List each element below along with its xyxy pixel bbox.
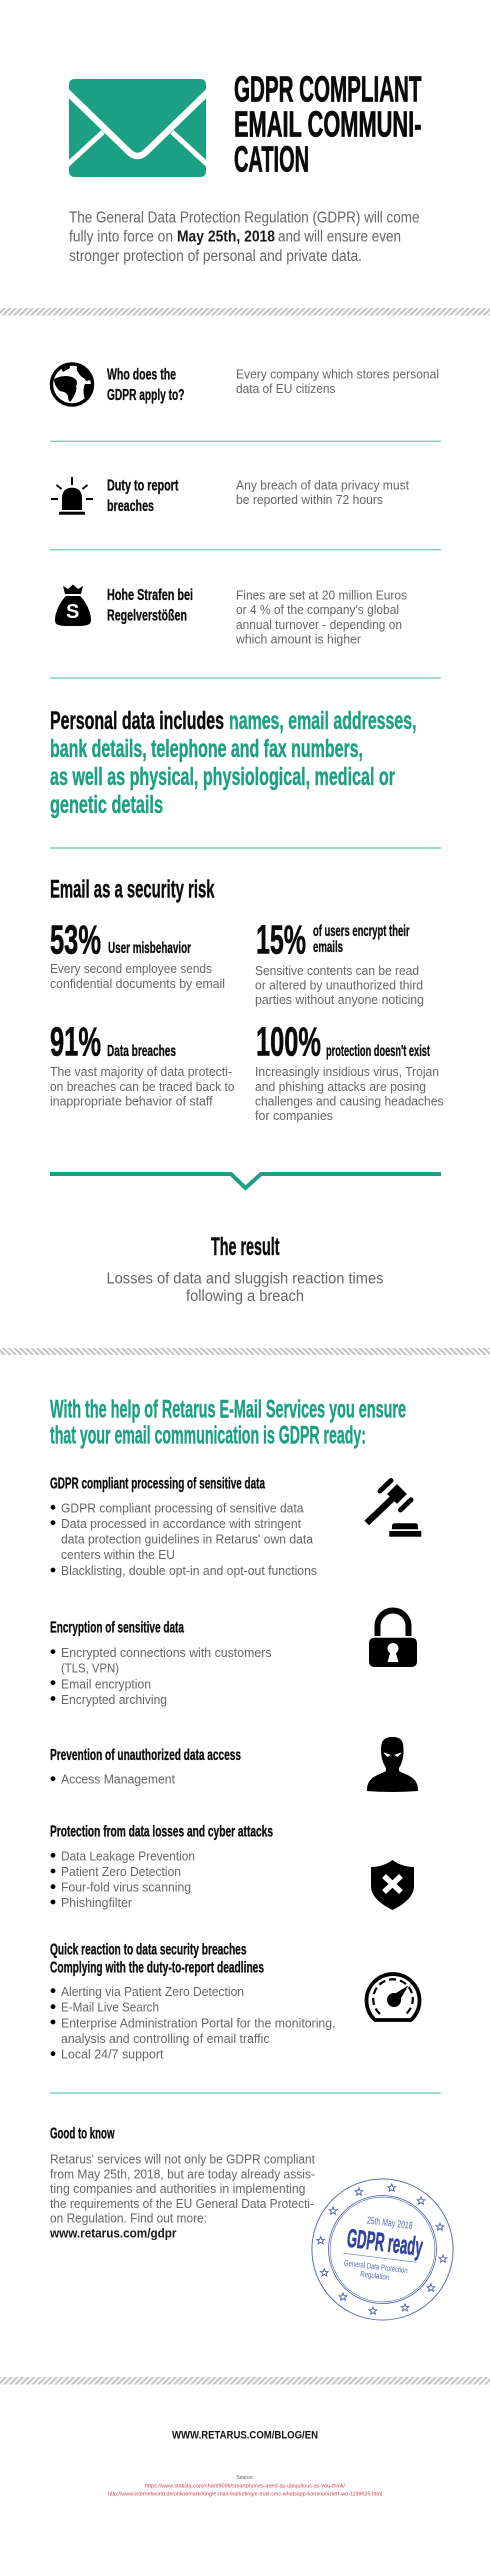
service: compliant processing: centers within the EU	[61, 1547, 175, 1562]
panel: good to know: www.retarus.com/gdpr	[49, 2226, 177, 2240]
service: data loss protection	[50, 1824, 273, 1910]
fact heading: GDPR apply to?	[107, 387, 184, 404]
icon: padlock	[369, 1610, 417, 1667]
panel: good to know: ting companies and authorities in implementing	[50, 2181, 306, 2196]
fact heading: Who does the	[107, 366, 176, 383]
service: prevention of unauthorized access: Access Management	[61, 1772, 175, 1787]
fact text: Every company which stores personal	[236, 366, 439, 381]
panel: the result: following a breach	[186, 1288, 304, 1305]
intro text: stronger protection of personal and private data.	[69, 248, 362, 265]
service: data loss protection: Patient Zero Detection	[61, 1864, 181, 1879]
panel: good to know: Retarus' services will not only be GDPR compliant	[50, 2152, 315, 2167]
stat: 53%: confidential documents by email	[50, 976, 225, 991]
icon: money bag	[55, 584, 91, 626]
title	[234, 69, 422, 180]
footer: sources	[108, 2475, 382, 2498]
fact: duty to report breaches	[51, 477, 409, 515]
stat: 91%	[50, 1019, 234, 1108]
intro text: May 25th, 2018	[177, 229, 275, 246]
stat: 53%: User misbehavior	[108, 940, 191, 957]
intro text: and will ensure even	[278, 229, 401, 246]
stat: 15%: emails	[313, 939, 343, 956]
fact text: Fines are set at 20 million Euros	[236, 587, 407, 602]
panel: good to know: from May 25th, 2018, but are today already assis-	[50, 2166, 315, 2182]
panel: retarus services	[50, 1396, 421, 2062]
footer: sources: https://www.statista.com/chart/9096/smartphones-arent-as-ubiquitous-as-you-think/	[145, 2483, 346, 2489]
panel: the result: Losses of data and sluggish reaction times	[106, 1270, 384, 1287]
icon: shield with cross	[371, 1860, 414, 1910]
fact heading: breaches	[107, 498, 154, 515]
service: compliant processing: GDPR compliant processing of sensitive data	[61, 1500, 304, 1515]
service: compliant processing: GDPR compliant processing of sensitive data	[50, 1475, 265, 1492]
service: encryption	[50, 1620, 272, 1707]
service: quick reaction: E-Mail Live Search	[61, 2000, 159, 2015]
fact text	[236, 366, 439, 396]
stat: 91%: on breaches can be traced back to	[50, 1079, 234, 1094]
panel: personal data statement	[50, 707, 416, 819]
stat: 53%: 53%	[50, 916, 101, 962]
service: encryption: Encrypted connections with customers	[61, 1645, 272, 1660]
fact text: Any breach of data privacy must	[236, 477, 409, 492]
fact heading	[107, 366, 184, 404]
service: quick reaction: Alerting via Patient Zero Detection	[61, 1984, 244, 1999]
fact heading: Duty to report	[107, 478, 179, 495]
stat: 15%: parties without anyone noticing	[255, 992, 424, 1007]
stamp: GDPR ready	[312, 2179, 453, 2320]
stat: 91%: The vast majority of data protecti-	[50, 1064, 232, 1079]
icon: money bag: S	[66, 601, 79, 623]
stat: 100%: Increasingly insidious virus, Trojan	[255, 1064, 439, 1079]
service: compliant processing: data protection guidelines in Retarus' own data	[61, 1532, 314, 1547]
service: compliant processing: Data processed in accordance with stringent	[61, 1516, 301, 1531]
service: quick reaction: Complying with the duty-to-report deadlines	[50, 1959, 264, 1976]
service: data loss protection: Phishingfilter	[61, 1895, 133, 1910]
fact text: or 4 % of the company's global	[236, 602, 399, 617]
panel: good to know: the requirements of the EU General Data Protecti-	[50, 2196, 314, 2211]
service: quick reaction: Quick reaction to data security breaches	[50, 1941, 247, 1958]
intro text: fully into force on	[69, 229, 173, 246]
icon: gavel	[367, 1480, 421, 1537]
fact text: annual turnover - depending on	[236, 617, 402, 632]
service: encryption: Encryption of sensitive data	[50, 1620, 184, 1637]
fact heading: Hohe Strafen bei	[107, 587, 193, 604]
panel: email as a security risk	[50, 876, 444, 1123]
stat: 15%: or altered by unauthorized third	[255, 978, 423, 993]
service: prevention of unauthorized access	[50, 1747, 241, 1787]
panel: personal data statement: genetic details	[50, 791, 163, 819]
icon: globe	[52, 363, 92, 405]
stat: 15%: of users encrypt their	[313, 923, 410, 940]
icon: envelope	[65, 79, 210, 177]
stat: 53%: Every second employee sends	[50, 961, 212, 976]
fact heading	[107, 478, 179, 515]
stamp: GDPR ready: 25th May 2018	[366, 2215, 413, 2232]
stamp: GDPR ready: Regulation	[360, 2270, 390, 2282]
service: compliant processing	[50, 1475, 317, 1578]
stat: 15%: Sensitive contents can be read	[255, 963, 419, 978]
stat: 91%: 91%	[50, 1019, 101, 1065]
fact heading: Regelverstößen	[107, 608, 187, 625]
heading	[50, 1396, 406, 1449]
service: compliant processing: Blacklisting, double opt-in and opt-out functions	[61, 1563, 317, 1578]
service: quick reaction: analysis and controlling of email traffic	[61, 2031, 270, 2046]
fact text	[236, 477, 409, 507]
service: encryption: (TLS, VPN)	[61, 1661, 119, 1676]
stat: 100%: 100%	[256, 1019, 321, 1065]
panel: good to know: on Regulation. Find out more:	[50, 2211, 207, 2226]
icon: speedometer	[366, 1974, 419, 2020]
footer: blog url: WWW.RETARUS.COM/BLOG/EN	[172, 2430, 318, 2442]
panel: the result: The result	[211, 1233, 280, 1261]
fact text: be reported within 72 hours	[236, 492, 383, 507]
stat: 53%	[50, 916, 225, 991]
intro text	[69, 210, 420, 265]
panel: personal data statement: Personal data includes	[50, 707, 224, 735]
service: prevention of unauthorized access: Prevention of unauthorized data access	[50, 1747, 241, 1764]
panel: good to know	[49, 2126, 315, 2240]
title: CATION	[234, 139, 309, 180]
stat: 100%: and phishing attacks are posing	[255, 1079, 426, 1094]
fact text: data of EU citizens	[236, 381, 336, 396]
fact text	[235, 587, 407, 646]
service: data loss protection: Four-fold virus scanning	[61, 1880, 191, 1895]
panel: header	[65, 69, 422, 265]
footer: sources: http://www.internetworld.de/onlinemarketing/e-mail-marketing/e-mail-sms-whatsapp-kommuniziert-wo-1199626.html	[108, 2492, 382, 2498]
service: quick reaction: Local 24/7 support	[61, 2047, 164, 2062]
panel: the result	[106, 1233, 384, 1305]
stat: 91%: Data breaches	[107, 1043, 176, 1060]
service: data loss protection: Protection from data losses and cyber attacks	[50, 1824, 273, 1841]
icon: masked intruder	[367, 1737, 418, 1792]
stat: 15%: 15%	[256, 916, 306, 962]
arrow: divider pointing down	[50, 1174, 441, 1188]
service: quick reaction	[50, 1941, 336, 2062]
icon: siren	[51, 477, 93, 515]
service: encryption: Encrypted archiving	[61, 1692, 167, 1707]
intro text: The General Data Protection Regulation (GDPR) will come	[69, 210, 420, 227]
footer: sources: Source:	[236, 2475, 254, 2481]
fact heading	[107, 587, 193, 625]
fact: high fines	[55, 584, 407, 646]
heading: Email as a security risk	[50, 876, 215, 904]
stamp: GDPR ready: General Data Protection	[344, 2258, 408, 2275]
service: encryption: Email encryption	[61, 1676, 151, 1691]
fact: who does the GDPR apply to	[52, 363, 439, 405]
stat: 100%: for companies	[255, 1108, 333, 1123]
service: quick reaction: Enterprise Administration Portal for the monitoring,	[61, 2015, 336, 2030]
stat: 15%	[255, 916, 424, 1007]
panel: good to know: Good to know	[50, 2126, 115, 2143]
service: data loss protection: Data Leakage Prevention	[61, 1849, 195, 1864]
panel: key facts	[50, 363, 441, 678]
fact text: which amount is higher	[235, 632, 362, 646]
stat: 100%	[255, 1019, 444, 1123]
stat: 100%: challenges and causing headaches	[255, 1094, 444, 1108]
stat: 91%: inappropriate behavior of staff	[50, 1094, 213, 1108]
